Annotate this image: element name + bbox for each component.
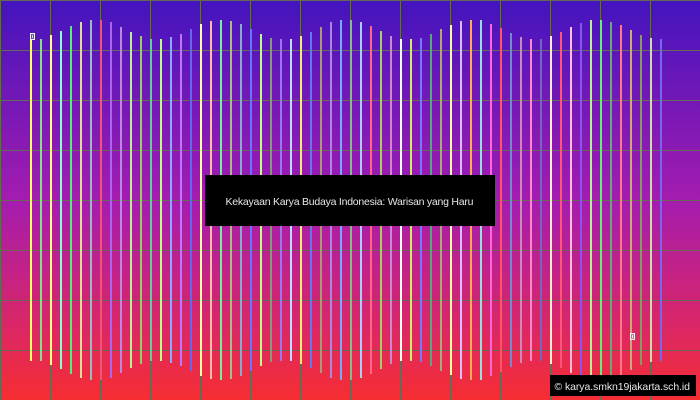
source badge bbox=[550, 375, 696, 396]
icon: missing-glyph marker bottom right bbox=[630, 334, 634, 340]
title: Kekayaan Karya Budaya Indonesia: Warisan yang Haru bbox=[226, 196, 474, 208]
source url: © karya.smkn19jakarta.sch.id bbox=[554, 381, 690, 393]
icon: missing-glyph marker top left bbox=[30, 34, 34, 40]
title panel bbox=[205, 175, 495, 226]
